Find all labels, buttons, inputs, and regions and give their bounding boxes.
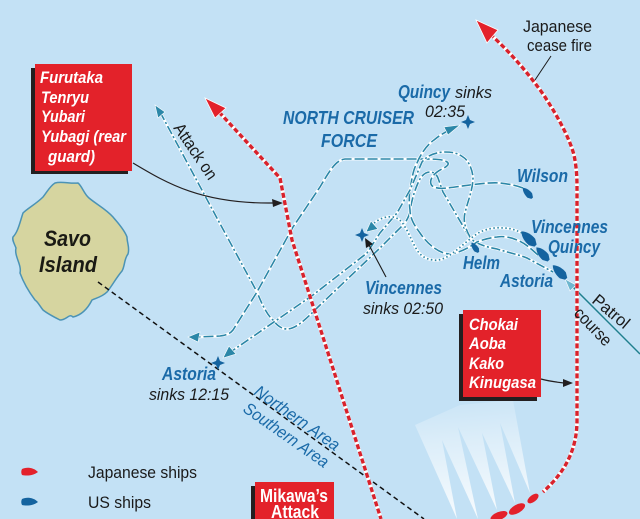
label: Patrol course bbox=[570, 291, 634, 350]
box: Furutaka group: guard) bbox=[47, 147, 95, 166]
arrow: Chokai group to track bbox=[541, 379, 573, 387]
label: Astoria sinks bbox=[149, 364, 230, 404]
legend: US ships: US ships bbox=[88, 493, 151, 512]
label: Japanese cease fire: Japanese bbox=[523, 17, 592, 36]
US ship tracks bbox=[155, 105, 553, 358]
Savo Island: Savo bbox=[44, 226, 91, 251]
arrow: Furutaka group to track bbox=[133, 163, 283, 207]
label: Patrol course: course bbox=[570, 304, 616, 350]
track: attack on bbox=[155, 105, 553, 329]
label: Vincennes: Vincennes bbox=[531, 217, 608, 237]
track: Astoria bbox=[223, 152, 473, 358]
area labels: Southern Area bbox=[240, 399, 333, 472]
area boundary line bbox=[98, 282, 424, 519]
ship: Wilson bbox=[520, 186, 535, 200]
label: North Cruiser Force: FORCE bbox=[321, 131, 378, 151]
legend: US ships bbox=[21, 493, 151, 512]
track: Wilson bbox=[188, 159, 523, 342]
box: Chokai group: Kinugasa bbox=[469, 373, 536, 392]
box: Furutaka group: Yubagi (rear bbox=[41, 127, 127, 146]
label: Helm: Helm bbox=[463, 253, 500, 273]
searchlight beams bbox=[415, 400, 530, 519]
Japanese track: main group bbox=[476, 20, 577, 492]
sinking markers bbox=[211, 115, 475, 370]
box: Chokai group: Chokai bbox=[469, 315, 519, 334]
label: Vincennes sinks: Vincennes bbox=[365, 278, 442, 298]
label: Quincy sinks bbox=[398, 82, 492, 121]
patrol course line bbox=[565, 279, 640, 354]
label: Japanese cease fire: cease fire bbox=[527, 36, 592, 55]
ship: Vincennes bbox=[518, 228, 539, 249]
arrow: Vincennes sinking point bbox=[365, 238, 386, 277]
Savo Island bbox=[13, 182, 129, 320]
label: Astoria sinks: sinks 12:15 bbox=[149, 385, 230, 404]
label: Quincy sinks: sinks bbox=[455, 83, 492, 102]
Savo Island: Island bbox=[39, 252, 98, 277]
box: Furutaka group: Tenryu bbox=[41, 88, 90, 107]
Japanese track: west group bbox=[205, 98, 381, 519]
label: Attack on: Attack on bbox=[170, 120, 221, 183]
box: Chokai group: Aoba bbox=[468, 334, 506, 353]
box: Furutaka group bbox=[31, 64, 132, 174]
legend: Japanese ships bbox=[21, 463, 197, 482]
label: Wilson: Wilson bbox=[517, 166, 568, 186]
label: Quincy: Quincy bbox=[548, 237, 601, 257]
legend: Japanese ships: Japanese ships bbox=[88, 463, 197, 482]
label: North Cruiser Force: NORTH CRUISER bbox=[283, 108, 414, 128]
label: Astoria: Astoria bbox=[499, 271, 553, 291]
track: Vincennes bbox=[366, 217, 522, 260]
Japanese ships in column bbox=[489, 492, 540, 519]
label: Vincennes sinks bbox=[363, 278, 444, 318]
box: Chokai group bbox=[459, 310, 541, 401]
track: Quincy bbox=[409, 125, 538, 255]
ship: Quincy bbox=[533, 245, 552, 263]
marker: Vincennes bbox=[355, 228, 369, 242]
label: Vincennes sinks: sinks 02:50 bbox=[363, 299, 444, 318]
label: Japanese cease fire bbox=[523, 17, 592, 80]
box: Chokai group: Kako bbox=[469, 354, 504, 373]
box: Furutaka group: Furutaka bbox=[40, 68, 103, 87]
box: Mikawa's Attack: Mikawa’s bbox=[260, 486, 328, 506]
US ships bbox=[469, 186, 569, 282]
label: North Cruiser Force bbox=[283, 108, 414, 151]
ship: Astoria bbox=[550, 262, 569, 282]
legend bbox=[21, 463, 197, 512]
label: Quincy sinks: Quincy bbox=[398, 82, 451, 102]
area labels: Northern Area bbox=[251, 382, 344, 455]
label: Quincy sinks: 02:35 bbox=[425, 102, 466, 121]
marker: Quincy bbox=[461, 115, 475, 129]
marker: Astoria bbox=[211, 356, 225, 370]
ship: Helm bbox=[469, 241, 481, 254]
box: Mikawa's Attack bbox=[251, 482, 334, 519]
label: Patrol course: Patrol bbox=[588, 291, 634, 333]
label: Astoria sinks: Astoria bbox=[161, 364, 216, 384]
box: Furutaka group: Yubari bbox=[41, 107, 86, 126]
